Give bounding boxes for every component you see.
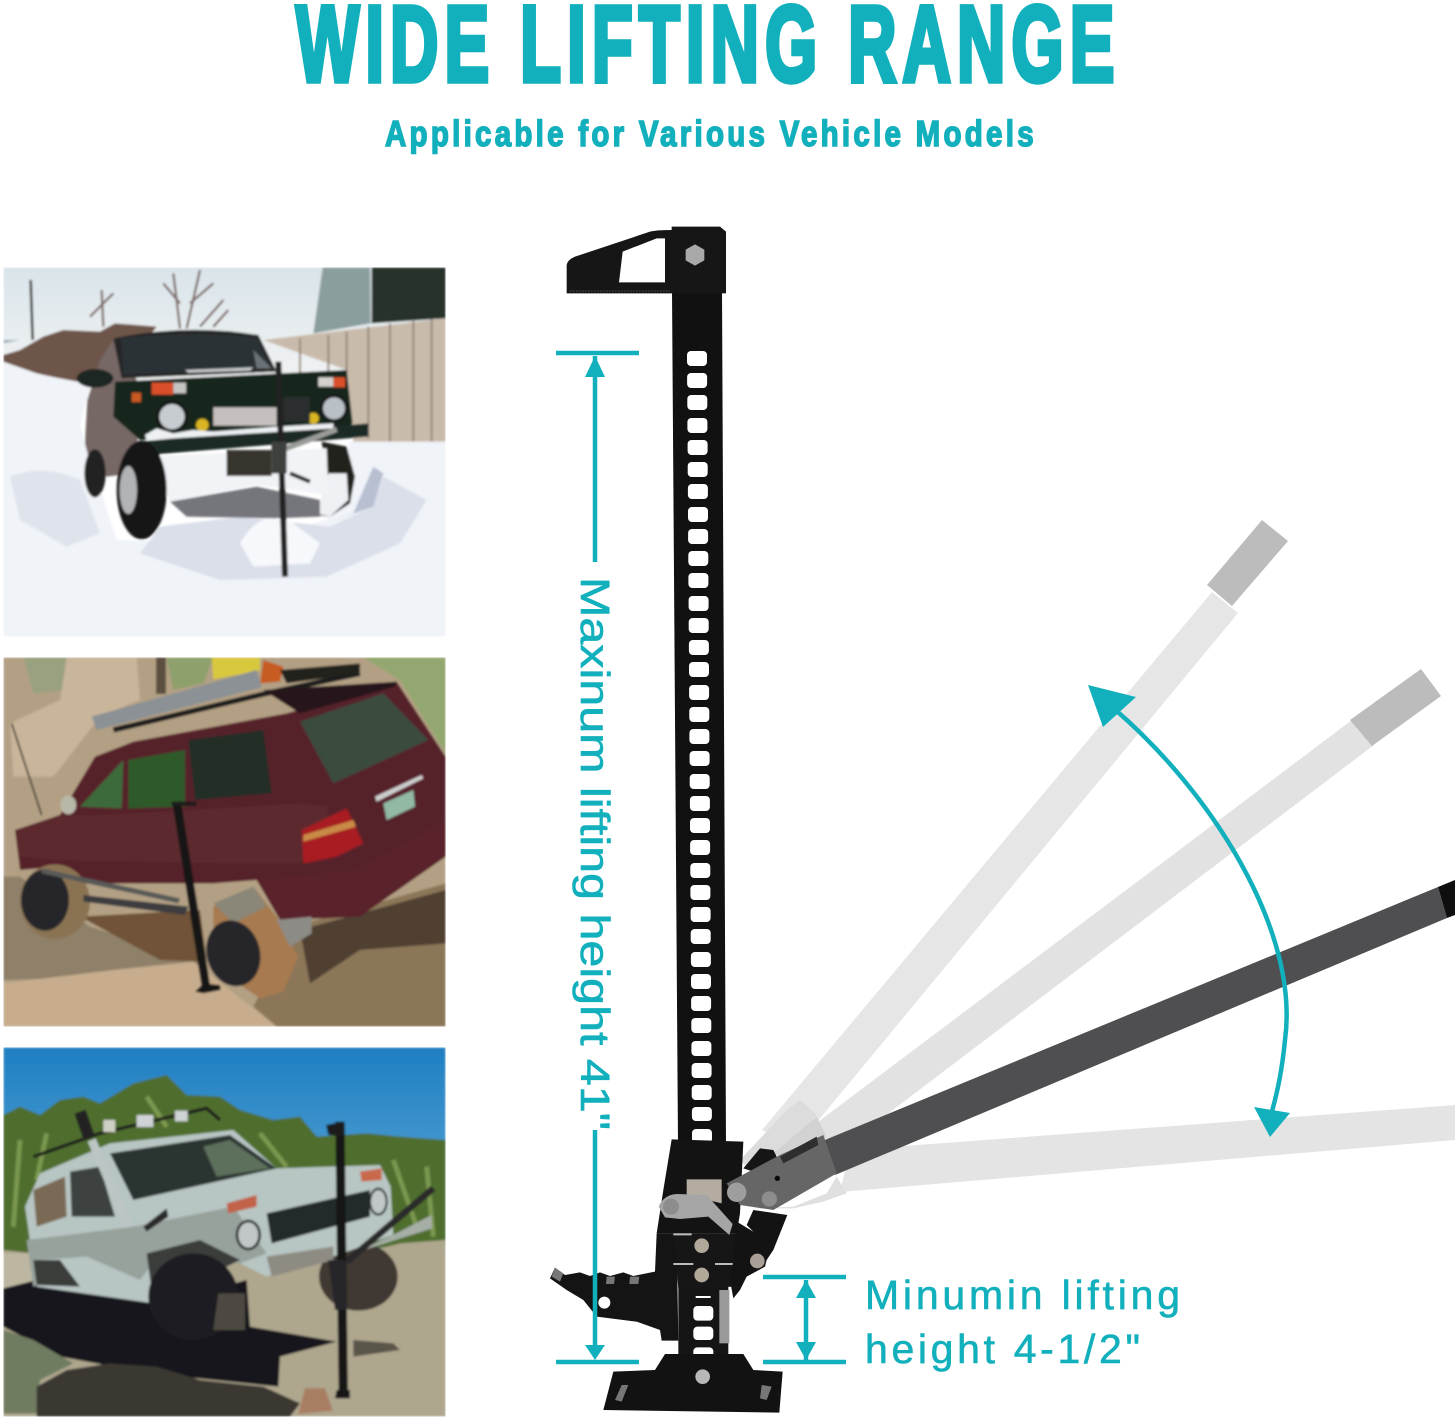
handle: second position, faded (810, 669, 1441, 1150)
panel: photo of car in snow (3, 267, 446, 637)
label: minimum lifting height (865, 1272, 1180, 1372)
jack lifting mechanism and base (550, 1135, 837, 1413)
handle: top position, faded (762, 520, 1288, 1145)
jack illustration (550, 227, 1455, 1413)
panel: photo of white off-roader in mud (3, 1047, 446, 1417)
panel: photo of maroon SUV on a muddy track (3, 657, 446, 1027)
dimension: maximum lifting height (556, 353, 639, 1362)
handle: lowest position, faded (840, 1105, 1455, 1192)
rotated label: Maxinum lifting height 41" (572, 577, 618, 1130)
arc arrow: handle swing range (1088, 685, 1290, 1137)
dimension: minimum lifting height (763, 1277, 846, 1362)
label: minimum lifting height: height 4-1/2" (865, 1326, 1140, 1372)
subtitle: Applicable for Various Vehicle Models (385, 113, 1034, 154)
handle: working position, dark (820, 880, 1455, 1175)
faded handle sockets (740, 1100, 847, 1208)
jack bar and head (567, 227, 726, 1145)
label: minimum lifting height: Minumin lifting (865, 1272, 1180, 1318)
